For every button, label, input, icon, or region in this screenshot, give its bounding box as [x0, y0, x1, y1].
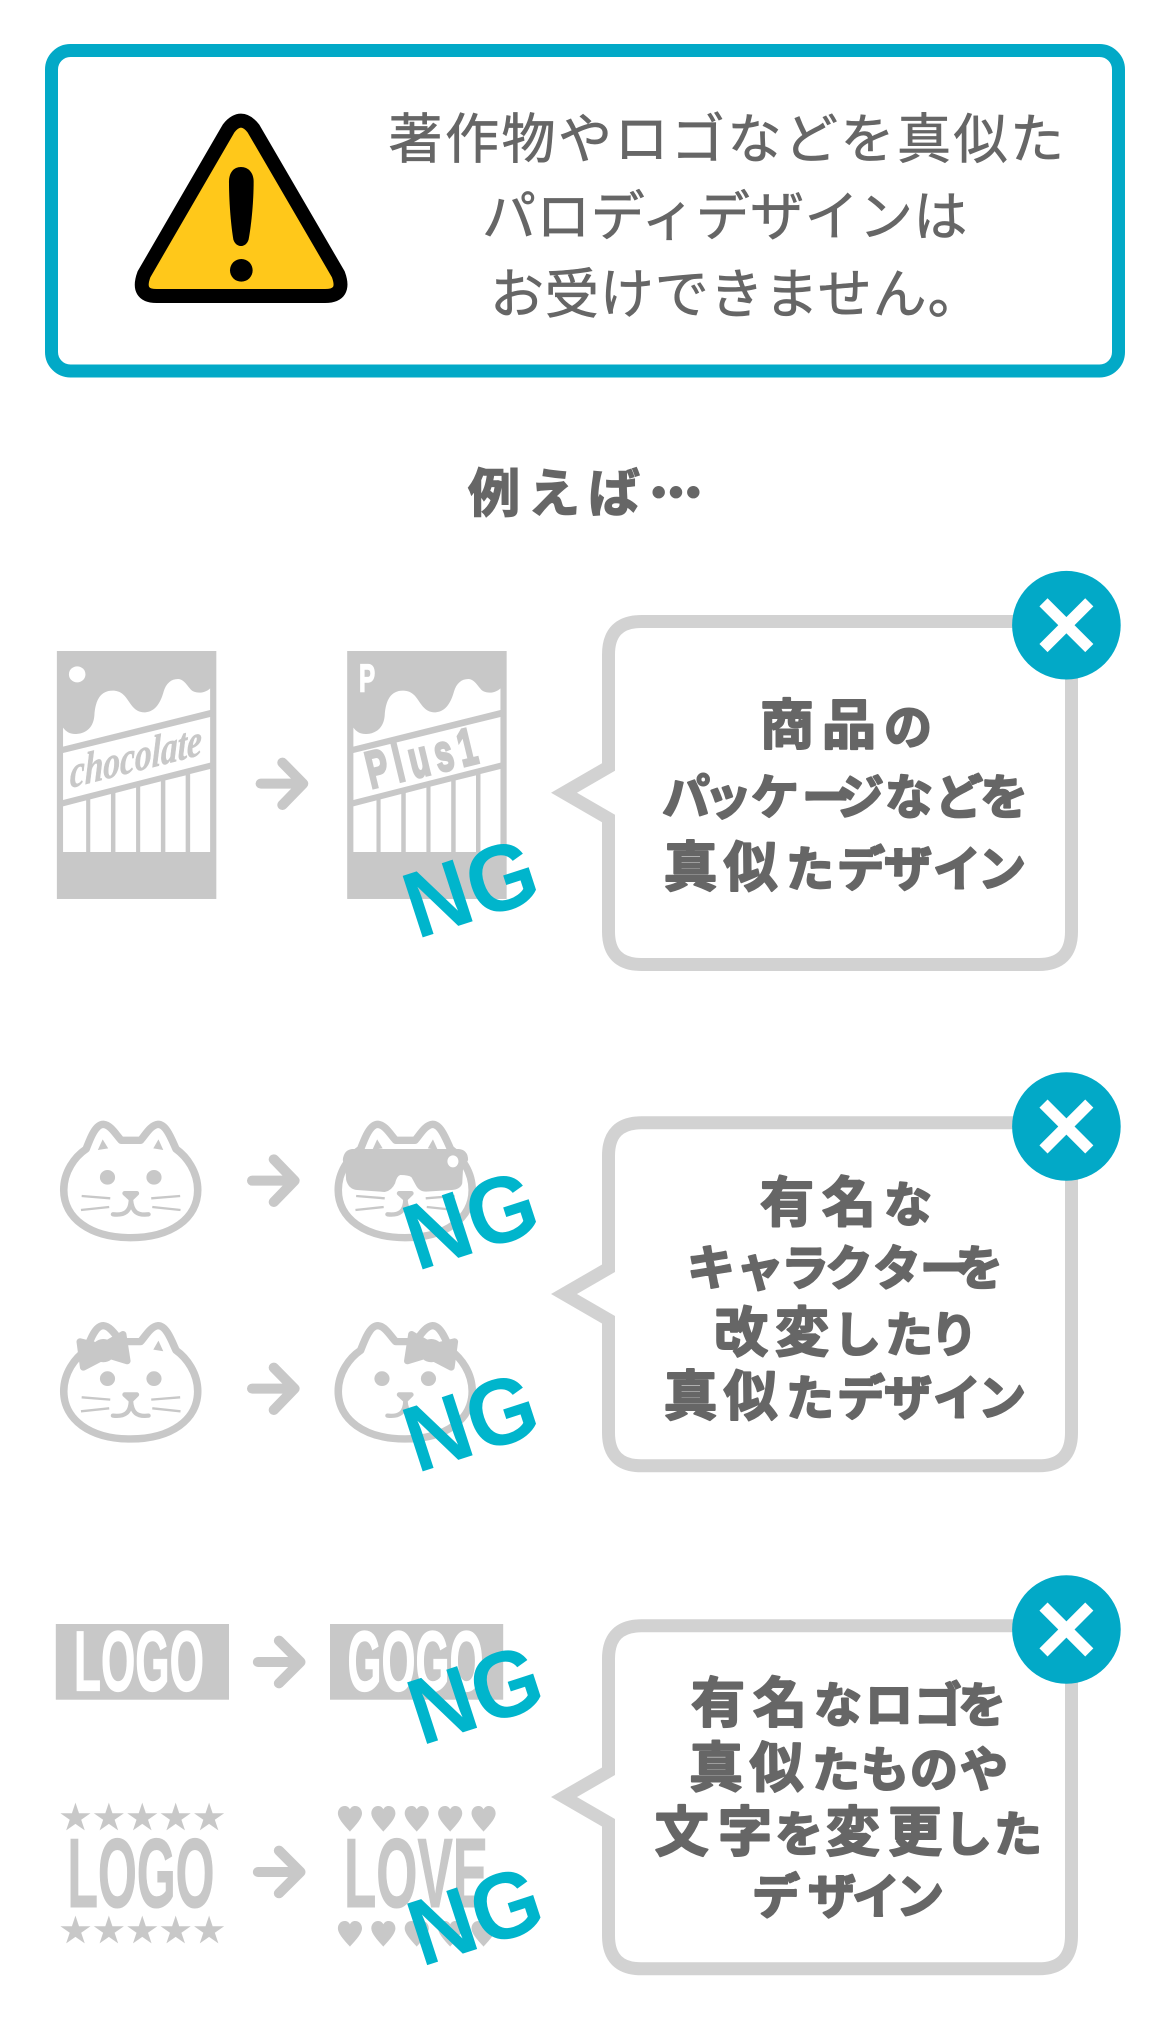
cat icons and arrows — [64, 1124, 472, 1439]
parody GOGO logo — [330, 1615, 503, 1710]
callout text: 真似たものや — [689, 1724, 1008, 1802]
NG mark: NG — [391, 1149, 551, 1290]
arrow — [258, 1641, 300, 1683]
arrow — [261, 763, 303, 805]
callout text — [655, 1659, 1042, 1928]
notice text: パロディデザインは — [482, 172, 968, 252]
cat original — [64, 1124, 198, 1238]
icon: cross badge — [1012, 571, 1121, 680]
notice text: お受けできません。 — [490, 250, 982, 329]
cat with bow on left — [64, 1326, 198, 1439]
callout text: 有名なロゴを — [691, 1659, 1006, 1738]
parody Plus1 package: Plus1 — [360, 716, 489, 800]
parody LOVE logo with hearts — [338, 1806, 496, 1947]
NG mark: NG — [391, 817, 551, 958]
callout text: パッケージなどを — [662, 758, 1028, 828]
callout text: 商品の — [760, 681, 932, 760]
parody Plus1 package — [347, 651, 507, 899]
icon: cross badge — [1012, 1072, 1121, 1181]
example 2: character — [64, 1072, 1121, 1492]
callout: logo — [564, 1575, 1121, 1969]
callout text: 改変したり — [714, 1288, 978, 1368]
notice text — [388, 95, 1066, 329]
star logo original: LOGO — [68, 1818, 214, 1928]
arrow — [258, 1851, 300, 1893]
parody LOVE logo with hearts: LOVE — [344, 1818, 488, 1928]
parody GOGO logo: GOGO — [348, 1615, 484, 1710]
callout text — [664, 1158, 1026, 1431]
icon: warning triangle — [142, 121, 340, 296]
callout text: デザイン — [752, 1858, 944, 1928]
panel: warning notice — [52, 50, 1118, 371]
notice text: 著作物やロゴなどを真似た — [388, 95, 1066, 174]
parody Plus1 package: P — [359, 657, 375, 700]
original chocolate package — [57, 651, 216, 899]
callout text — [662, 681, 1028, 902]
icon: cross badge — [1012, 1575, 1121, 1684]
callout text: キャラクターを — [687, 1229, 1003, 1299]
logo original on grey — [56, 1615, 229, 1710]
callout: character — [564, 1072, 1121, 1466]
arrow — [252, 1368, 294, 1410]
callout text: 有名な — [760, 1158, 932, 1238]
star logo original — [60, 1803, 224, 1943]
callout text: 真似たデザイン — [664, 1352, 1026, 1431]
callout text: 真似たデザイン — [664, 823, 1026, 902]
cat with sunglasses — [338, 1124, 472, 1238]
logo original on grey: LOGO — [74, 1615, 204, 1710]
heading: for example: 例えば… — [468, 452, 710, 527]
NG mark: NG — [395, 1845, 555, 1986]
original chocolate package: chocolate — [70, 714, 202, 798]
callout text: 文字を変更した — [655, 1788, 1042, 1867]
cat with bow on right — [338, 1326, 472, 1439]
NG mark: NG — [395, 1623, 555, 1765]
NG mark: NG — [391, 1351, 551, 1492]
example 3: logo — [56, 1575, 1121, 1986]
callout: product — [564, 571, 1121, 964]
arrow — [252, 1159, 294, 1202]
example 1: product package — [57, 571, 1121, 964]
